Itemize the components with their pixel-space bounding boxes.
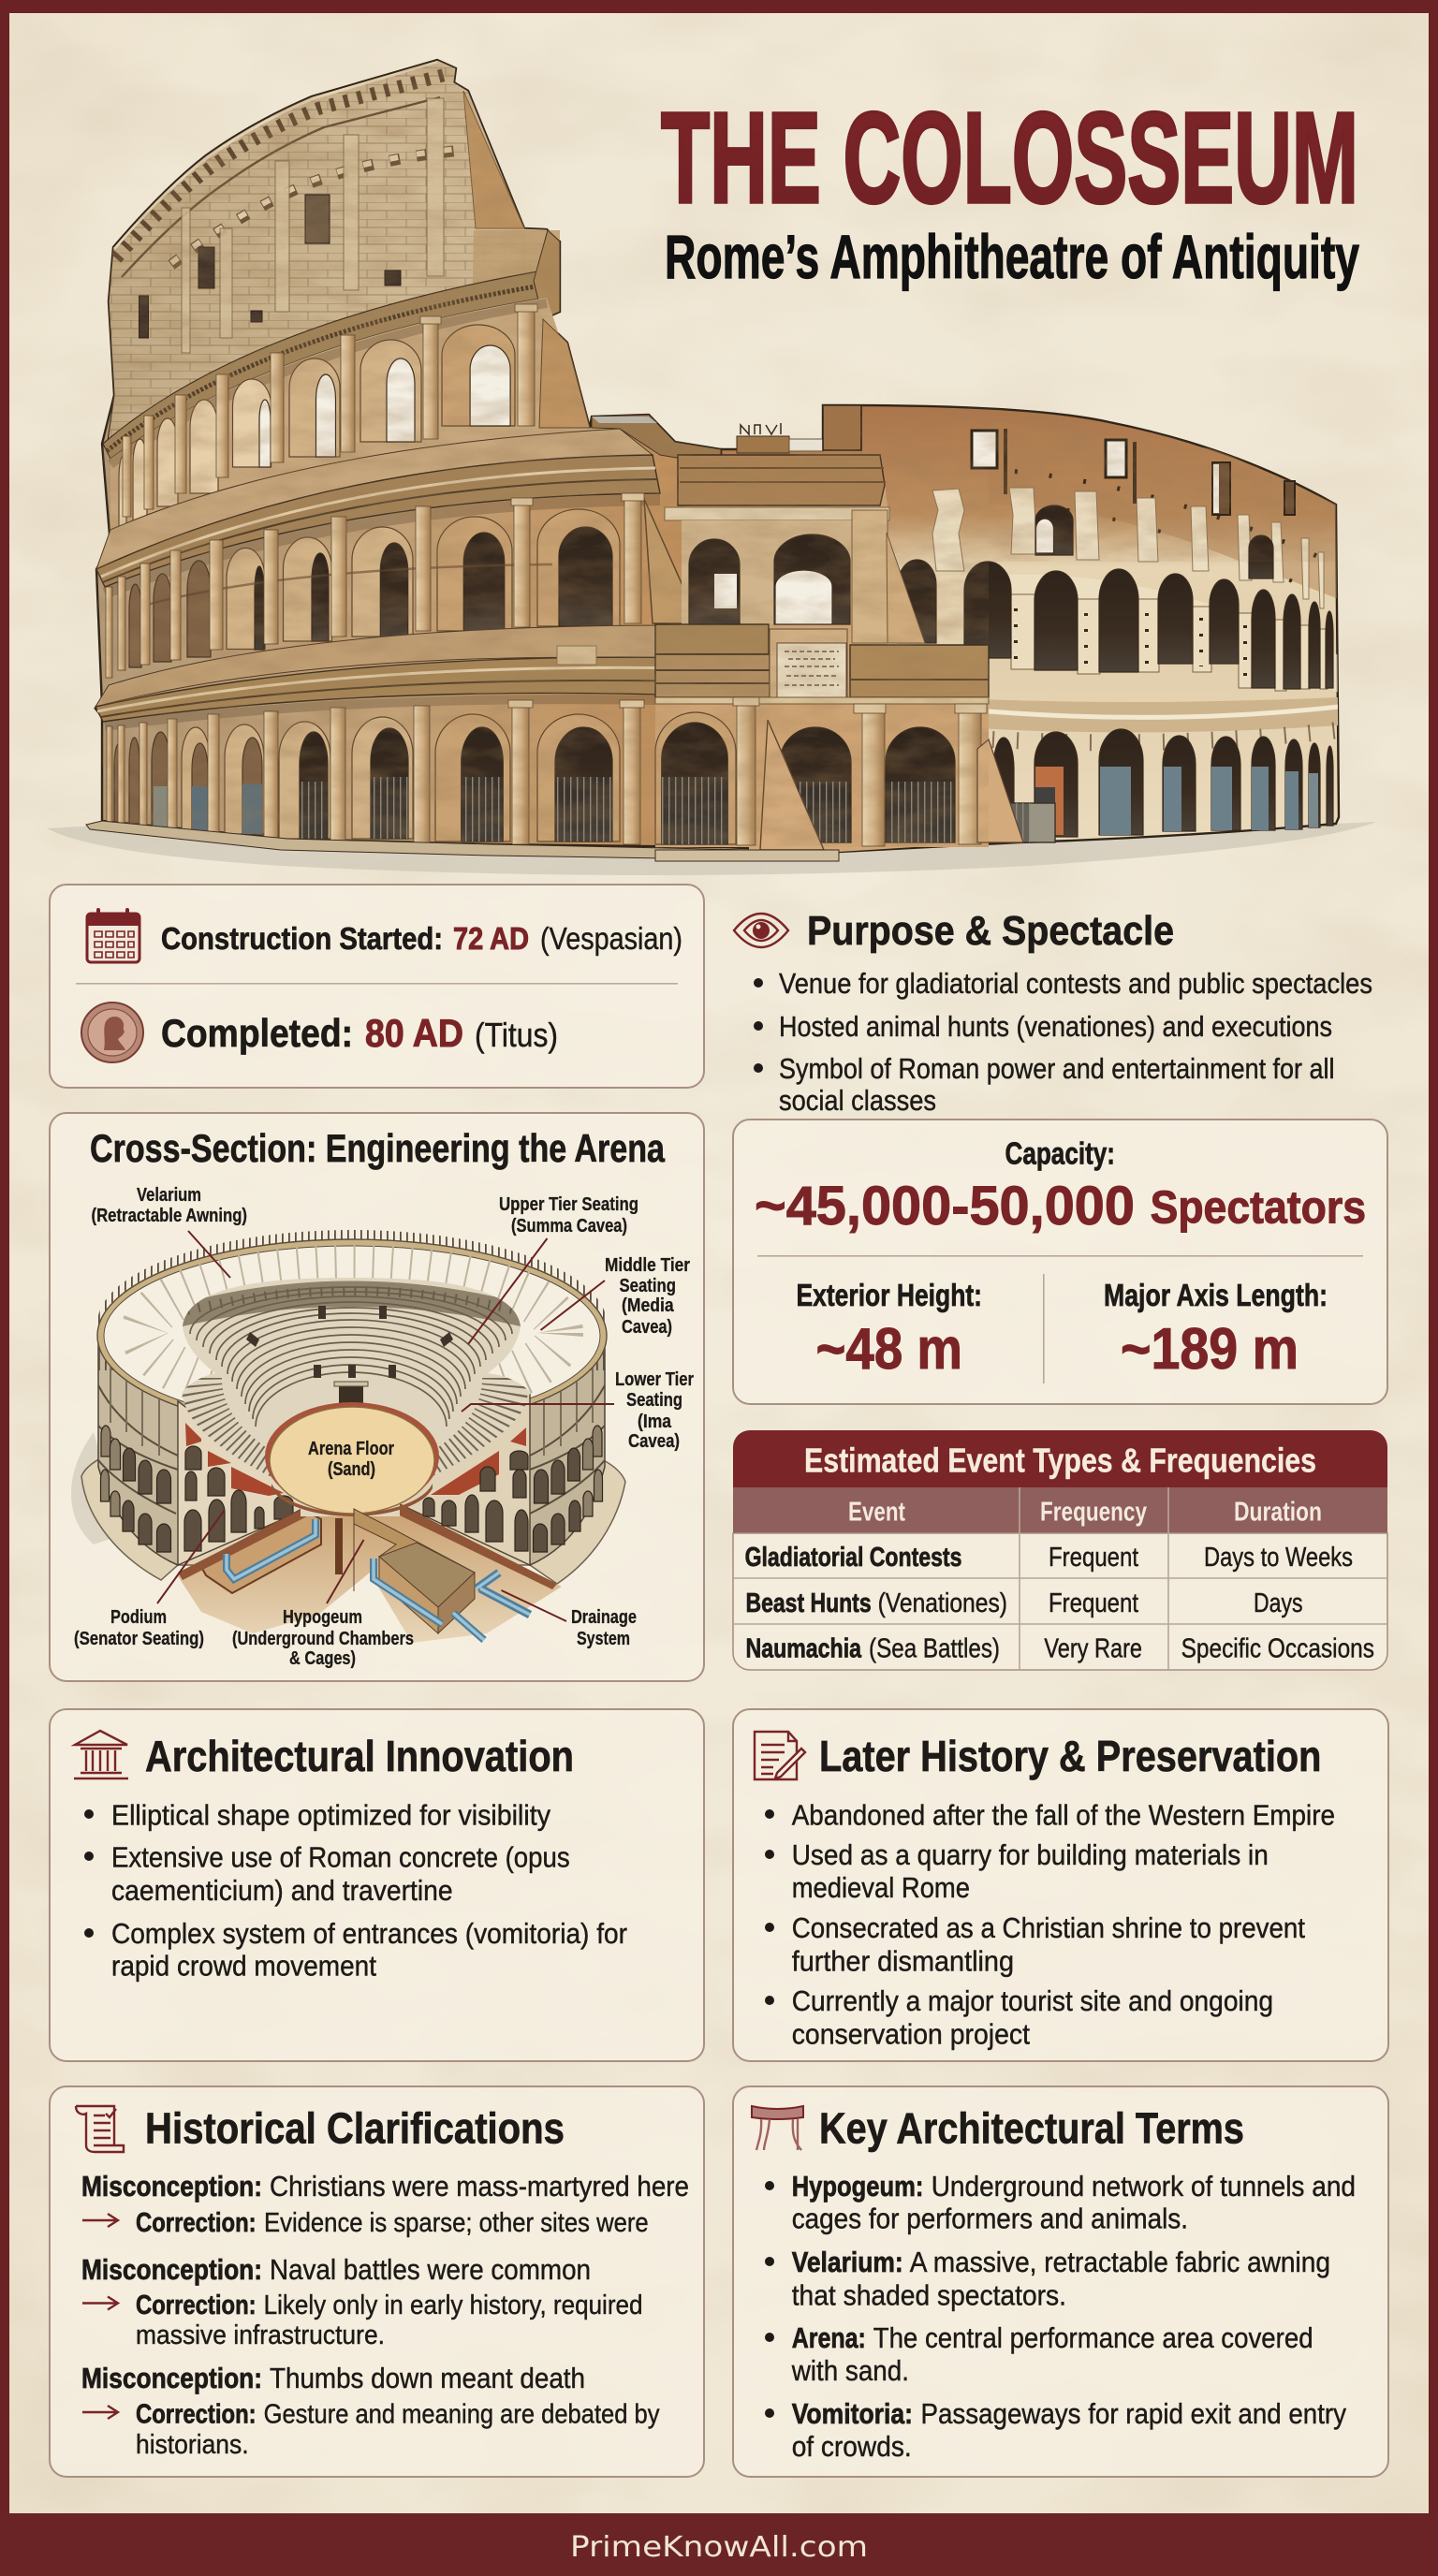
attic cornice [116,73,451,258]
diagram labels: Lower Tier [615,1369,694,1390]
table: event types and frequencies: Very Rare [1044,1634,1142,1664]
diagram labels: Drainage [571,1607,637,1628]
panel: historical clarifications: Misconception: [81,2170,262,2203]
diagram labels [74,1185,694,1669]
panel: key statistics: Capacity: [1005,1136,1115,1170]
panel: key architectural terms: A massive, retractable fabric awning [910,2246,1330,2278]
panel: later history and preservation: Later History & Preservation [819,1732,1321,1780]
level 3 arches [442,325,515,426]
cornice A [103,271,560,459]
panel: key architectural terms: that shaded spectators. [792,2278,1066,2312]
panel: key statistics: Exterior Height: [796,1278,982,1312]
section: purpose and spectacle [734,908,1372,1117]
outer wall [98,1336,184,1565]
section: purpose and spectacle: social classes [779,1084,936,1117]
panel: construction dates: (Titus) [475,1016,558,1054]
earth [178,1504,562,1643]
panel: later history and preservation: further dismantling [792,1945,1014,1978]
attic windows [139,195,401,338]
plaque [770,629,847,697]
panel: historical clarifications: Naval battles were common [270,2253,591,2286]
pier fragments [932,488,1324,608]
central block [655,405,1023,861]
panel: later history and preservation: Currently a major tourist site and ongoing [792,1984,1273,2017]
panel: key architectural terms: Underground network of tunnels and [932,2170,1356,2203]
panel: key architectural terms: Velarium: [792,2246,903,2278]
panel: architectural innovation: caementicium) and travertine [111,1874,453,1907]
diagram labels: System [577,1629,630,1649]
panel: construction dates: Construction Started: [161,921,443,956]
panel: historical clarifications: Historical Clarifications [145,2103,565,2152]
left body [86,60,839,861]
floor beams and pipe trench [199,1509,321,1593]
diagram labels: (Sand) [328,1459,375,1480]
panel: historical clarifications: Correction: [136,2291,257,2320]
level 3 columns [518,306,535,426]
panel: later history and preservation: medieval Rome [792,1871,970,1904]
panel: architectural innovation: Architectural Innovation [145,1732,574,1780]
table: event types and frequencies: Duration [1234,1498,1322,1528]
level 2 buttress [644,499,699,623]
illustration: Colosseum exterior [47,47,1376,875]
watercolor mottling [84,47,1348,861]
icon: temple [74,1731,128,1778]
panel: later history and preservation: conservation project [792,2018,1030,2051]
panel: key architectural terms: of crowds. [792,2430,912,2463]
panel: key architectural terms: The central performance area covered [873,2321,1313,2354]
panel: key architectural terms: Passageways for rapid exit and entry [921,2397,1346,2430]
level 1 columns [624,704,640,844]
panel: historical clarifications: Gesture and meaning are debated by [264,2400,660,2430]
icon: awning gate [752,2106,803,2150]
table: event types and frequencies: Frequent [1049,1588,1138,1618]
section: purpose and spectacle: Symbol of Roman power and entertainment for all [779,1052,1335,1085]
table: event types and frequencies: Frequent [1049,1543,1138,1573]
panel: construction dates: (Vespasian) [540,921,682,956]
panel: architectural innovation: rapid crowd movement [111,1949,376,1982]
velarium ring [100,1242,604,1429]
panel: key statistics: Spectators [1151,1183,1366,1234]
panel: architectural innovation: Extensive use of Roman concrete (opus [111,1840,570,1873]
level 1 arches [537,714,620,842]
panel: architectural innovation [50,1709,704,2061]
corbels [171,151,458,265]
panel: historical clarifications: historians. [136,2430,249,2460]
table: event types and frequencies: Gladiatorial Contests [745,1543,961,1573]
panel: historical clarifications: Misconception: [81,2253,262,2286]
panel: historical clarifications: massive infrastructure. [136,2320,385,2350]
panel: architectural innovation: Elliptical shape optimized for visibility [111,1798,550,1831]
title [661,86,1359,291]
panel: cross-section [50,1113,704,1681]
table: event types and frequencies [733,1430,1387,1670]
panel: key architectural terms: with sand. [791,2354,909,2387]
pipes [227,1519,315,1579]
hypogeum box [354,1509,475,1607]
diagram labels: (Senator Seating) [74,1629,204,1649]
arrow [82,2406,118,2419]
panel: later history and preservation: Consecrated as a Christian shrine to prevent [792,1911,1305,1944]
table: event types and frequencies: Frequency [1040,1498,1147,1528]
masts [97,1230,607,1370]
level 3 wall [110,298,620,530]
section: purpose and spectacle: Hosted animal hunts (venationes) and executions [779,1010,1332,1043]
panel: later history and preservation: Used as a quarry for building materials in [792,1838,1269,1871]
panel: key statistics: Major Axis Length: [1104,1278,1328,1312]
heading: cross-section: Cross-Section: Engineering the Arena [90,1126,666,1170]
diagram labels: Seating [620,1276,676,1296]
diagram labels: Hypogeum [283,1607,362,1628]
table: event types and frequencies: (Sea Battles) [869,1634,1000,1664]
table: event types and frequencies: Event [848,1498,905,1528]
panel: key architectural terms: Arena: [792,2321,866,2354]
lower central arches [655,712,736,844]
right ruined section [721,405,1339,852]
panel: key architectural terms: Hypogeum: [792,2170,923,2203]
right cutaway [400,1395,530,1565]
panel: later history and preservation: Abandoned after the fall of the Western Empire [792,1798,1335,1831]
leader lines [188,1231,230,1278]
section: purpose and spectacle: Venue for gladiatorial contests and public spectacles [779,967,1372,1000]
panel: later history and preservation [733,1709,1388,2061]
panel: key statistics [733,1120,1387,1404]
table: event types and frequencies: (Venationes) [878,1588,1007,1618]
panel: key architectural terms [733,2086,1388,2477]
level 2 arches [537,509,620,626]
diagram labels: Velarium [137,1185,201,1206]
table: event types and frequencies: Days to Weeks [1204,1543,1353,1573]
diagram labels: Podium [110,1607,167,1628]
wall arches [101,1426,110,1456]
icon: coin [81,1003,143,1062]
diagram labels: (Summa Cavea) [511,1216,627,1237]
table: event types and frequencies: Beast Hunts [745,1588,872,1618]
icon: scroll [76,2106,124,2152]
diagram labels: Middle Tier [605,1255,690,1276]
panel: key statistics: ~45,000-50,000 [755,1176,1135,1237]
table: event types and frequencies: Days [1254,1588,1303,1618]
panel: key statistics: ~189 m [1121,1317,1299,1382]
diagram labels: (Ima [638,1412,672,1432]
panel: construction dates: 80 AD [365,1011,463,1055]
panel: historical clarifications: Evidence is sparse; other sites were [264,2208,649,2238]
diagram labels: & Cages) [289,1648,356,1669]
panel: architectural innovation: Complex system of entrances (vomitoria) for [111,1917,627,1950]
panel: historical clarifications: Misconception: [81,2362,262,2394]
square windows [972,431,997,468]
panel: historical clarifications: Thumbs down meant death [270,2362,585,2394]
panel: key architectural terms: cages for performers and animals. [792,2203,1188,2235]
seating bowl [178,1273,534,1526]
icon: eye [734,914,788,947]
icon: document and pen [755,1732,805,1779]
diagram: amphitheatre cutaway [71,1230,625,1643]
panel: construction dates: Completed: [161,1011,353,1055]
panel: key architectural terms: Vomitoria: [792,2397,913,2430]
footer [0,2513,1438,2576]
diagram labels: (Media [622,1295,674,1316]
level 2 columns [624,496,641,623]
diagram labels: (Underground Chambers [232,1629,414,1649]
arrow [82,2297,118,2310]
buttress [760,720,824,850]
panel: historical clarifications: Christians were mass-martyred here [270,2170,689,2203]
panel: construction dates [50,885,704,1088]
parapet 3 and cornice C [96,429,653,569]
shadow and base disc [71,1432,122,1544]
panel: historical clarifications: Correction: [136,2400,257,2430]
footer: PrimeKnowAll.com [570,2531,868,2564]
diagram labels: Arena Floor [308,1439,394,1459]
attic pilasters [182,98,444,353]
icon: calendar [87,908,139,962]
diagram labels: Seating [626,1390,682,1411]
diagram labels: Upper Tier Seating [499,1194,638,1215]
diagram labels: Cavea) [628,1431,680,1452]
panel: historical clarifications: Likely only in early history, required [264,2291,642,2320]
attic wall [107,60,560,447]
panel: key architectural terms: Key Architectural Terms [819,2103,1244,2152]
table: event types and frequencies: Specific Occasions [1181,1634,1374,1664]
diagram labels: Cavea) [622,1317,672,1338]
panel: historical clarifications: Correction: [136,2208,257,2238]
arrow [82,2214,118,2227]
table: event types and frequencies: Estimated Event Types & Frequencies [804,1442,1316,1480]
panel: key statistics: ~48 m [816,1317,962,1382]
arena floor [265,1402,439,1511]
parapet 2 and cornice D [95,625,768,707]
left cutaway [178,1401,304,1565]
diagram labels: (Retractable Awning) [92,1206,247,1226]
gates [555,777,612,842]
table: event types and frequencies: Naumachia [745,1634,862,1664]
panel: historical clarifications [50,2086,704,2477]
fence [1009,803,1055,842]
panel: construction dates: 72 AD [453,921,529,956]
section: purpose and spectacle: Purpose & Spectacle [807,908,1174,954]
ground arches right [993,738,1014,842]
